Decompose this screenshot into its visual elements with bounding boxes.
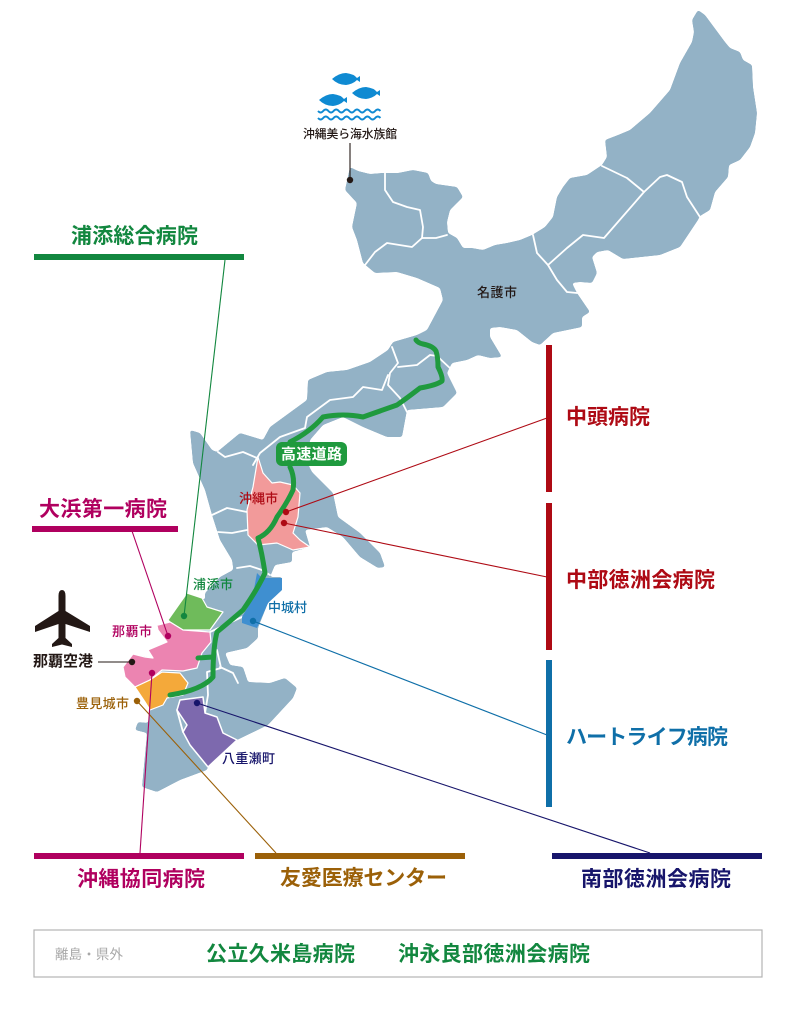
heading: 中頭病院: 中頭病院 bbox=[566, 406, 650, 429]
heading: 沖縄協同病院 bbox=[34, 853, 244, 891]
heading: 浦添総合病院: 浦添総合病院 bbox=[71, 225, 198, 248]
area: 八重瀬町 bbox=[177, 697, 237, 767]
place names: 沖縄市 bbox=[239, 491, 278, 506]
heading: 大浜第一病院 bbox=[32, 498, 178, 532]
panel: remote islands and outside prefecture: 離島・県外 bbox=[55, 947, 124, 962]
heading: 中頭病院 bbox=[546, 345, 650, 492]
heading: 沖縄協同病院: 沖縄協同病院 bbox=[77, 868, 205, 891]
expressway bbox=[170, 340, 442, 695]
label: 高速道路 bbox=[276, 442, 347, 466]
heading: ハートライフ病院: ハートライフ病院 bbox=[566, 726, 728, 749]
heading: 大浜第一病院: 大浜第一病院 bbox=[39, 498, 167, 521]
place names: 那覇市 bbox=[112, 624, 152, 639]
place names: 中城村 bbox=[268, 600, 307, 615]
place names: 沖縄美ら海水族館 bbox=[303, 127, 397, 141]
map: Okinawa main island bbox=[123, 10, 757, 792]
panel: remote islands and outside prefecture bbox=[34, 930, 762, 977]
icon: fish and waves bbox=[318, 73, 380, 120]
place names: 浦添市 bbox=[193, 577, 233, 592]
panel: remote islands and outside prefecture: 沖永良部徳洲会病院 bbox=[398, 943, 590, 966]
panel: remote islands and outside prefecture: 公立久米島病院 bbox=[206, 943, 355, 966]
heading: 友愛医療センター: 友愛医療センター bbox=[280, 867, 447, 890]
area: 沖縄市 bbox=[247, 457, 310, 550]
heading: 南部徳洲会病院: 南部徳洲会病院 bbox=[581, 868, 731, 891]
place names: 八重瀬町 bbox=[222, 751, 275, 766]
place names: 豊見城市 bbox=[76, 696, 129, 711]
leader lines bbox=[98, 143, 650, 853]
heading: 中部徳洲会病院 bbox=[546, 503, 715, 650]
municipal boundaries bbox=[177, 166, 700, 732]
place names: 那覇空港 bbox=[33, 652, 93, 670]
heading: 中部徳洲会病院: 中部徳洲会病院 bbox=[566, 569, 715, 592]
heading: 浦添総合病院 bbox=[34, 225, 244, 260]
place names: 名護市 bbox=[477, 285, 517, 300]
label: 高速道路: 高速道路 bbox=[281, 445, 342, 463]
heading: 友愛医療センター bbox=[255, 853, 465, 890]
area: 浦添市 bbox=[168, 593, 223, 630]
location dots bbox=[129, 177, 353, 706]
area: 那覇市 bbox=[123, 617, 211, 687]
icon: airplane bbox=[35, 590, 90, 647]
place names bbox=[33, 127, 517, 766]
area: 中城村 bbox=[242, 573, 282, 628]
heading: 南部徳洲会病院 bbox=[552, 853, 762, 891]
heading: ハートライフ病院 bbox=[546, 660, 728, 807]
area: 豊見城市 bbox=[127, 672, 188, 710]
